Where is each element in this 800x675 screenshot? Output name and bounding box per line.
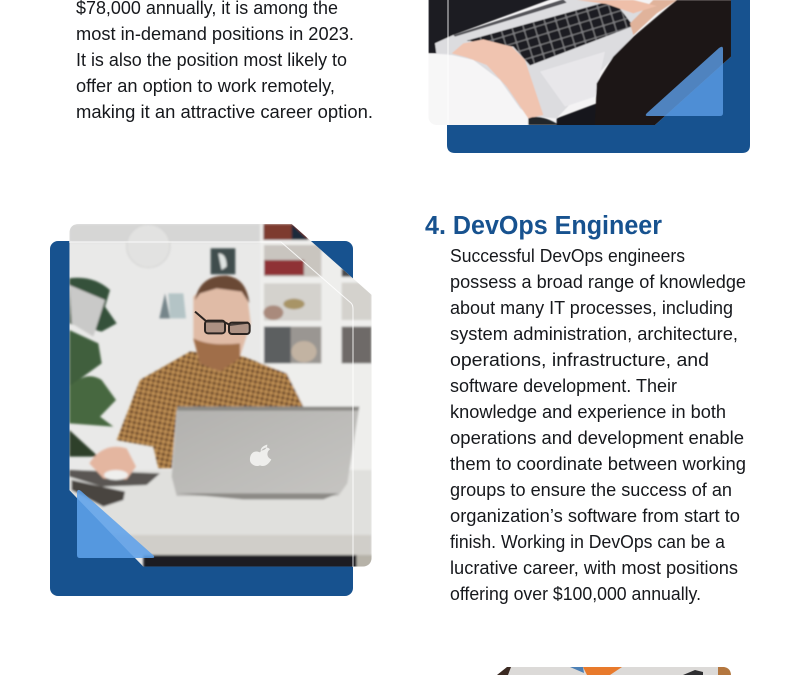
icon: apple logo on laptop xyxy=(250,445,271,466)
man xyxy=(117,352,303,468)
wall decor xyxy=(127,224,170,268)
decorative outline segment on laptop photo xyxy=(447,0,449,125)
text block: DevOps Engineer description: organization’s software from start to xyxy=(450,506,740,526)
heading: DevOps Engineer: 4. DevOps Engineer xyxy=(425,212,662,240)
text block: third role description ending: offer an option to work remotely, xyxy=(76,76,335,96)
glasses xyxy=(195,312,248,325)
panel: blue backing card for laptop photo xyxy=(447,0,750,153)
photo: next section image top edge xyxy=(497,667,731,675)
text block: DevOps Engineer description: about many IT processes, including xyxy=(450,298,733,318)
panel: blue backing card for man photo xyxy=(50,241,353,596)
desk xyxy=(69,470,372,535)
text block: DevOps Engineer description: operations, infrastructure, and xyxy=(450,350,709,370)
icon: translucent blue triangle on laptop photo xyxy=(646,47,723,116)
shelves xyxy=(260,224,375,471)
text block: DevOps Engineer description: system administration, architecture, xyxy=(450,324,738,344)
text block: DevOps Engineer description: software development. Their xyxy=(450,376,677,396)
decorative outline on man photo xyxy=(69,242,353,567)
text block: DevOps Engineer description: them to coordinate between working xyxy=(450,454,746,474)
text block: third role description ending: making it an attractive career option. xyxy=(76,102,373,122)
photo: man working at a laptop xyxy=(69,224,375,568)
text block: third role description ending: most in-demand positions in 2023. xyxy=(76,24,354,44)
text block: third role description ending: It is also the position most likely to xyxy=(76,50,347,70)
plant xyxy=(69,278,117,332)
icon: translucent blue triangle on man photo xyxy=(77,490,154,558)
text block: DevOps Engineer description xyxy=(450,246,746,604)
text block: DevOps Engineer description: possess a broad range of knowledge xyxy=(450,272,746,292)
text block: DevOps Engineer description: lucrative career, with most positions xyxy=(450,558,738,578)
text block: third role description ending xyxy=(76,0,373,122)
text block: DevOps Engineer description: knowledge and experience in both xyxy=(450,402,726,422)
text block: DevOps Engineer description: operations and development enable xyxy=(450,428,744,448)
laptop xyxy=(172,407,359,496)
text block: DevOps Engineer description: finish. Working in DevOps can be a xyxy=(450,532,726,552)
text block: DevOps Engineer description: groups to ensure the success of an xyxy=(450,480,732,500)
photo: person typing on a laptop xyxy=(428,0,733,127)
text block: DevOps Engineer description: offering over $100,000 annually. xyxy=(450,584,701,604)
text block: DevOps Engineer description: Successful DevOps engineers xyxy=(450,246,685,266)
